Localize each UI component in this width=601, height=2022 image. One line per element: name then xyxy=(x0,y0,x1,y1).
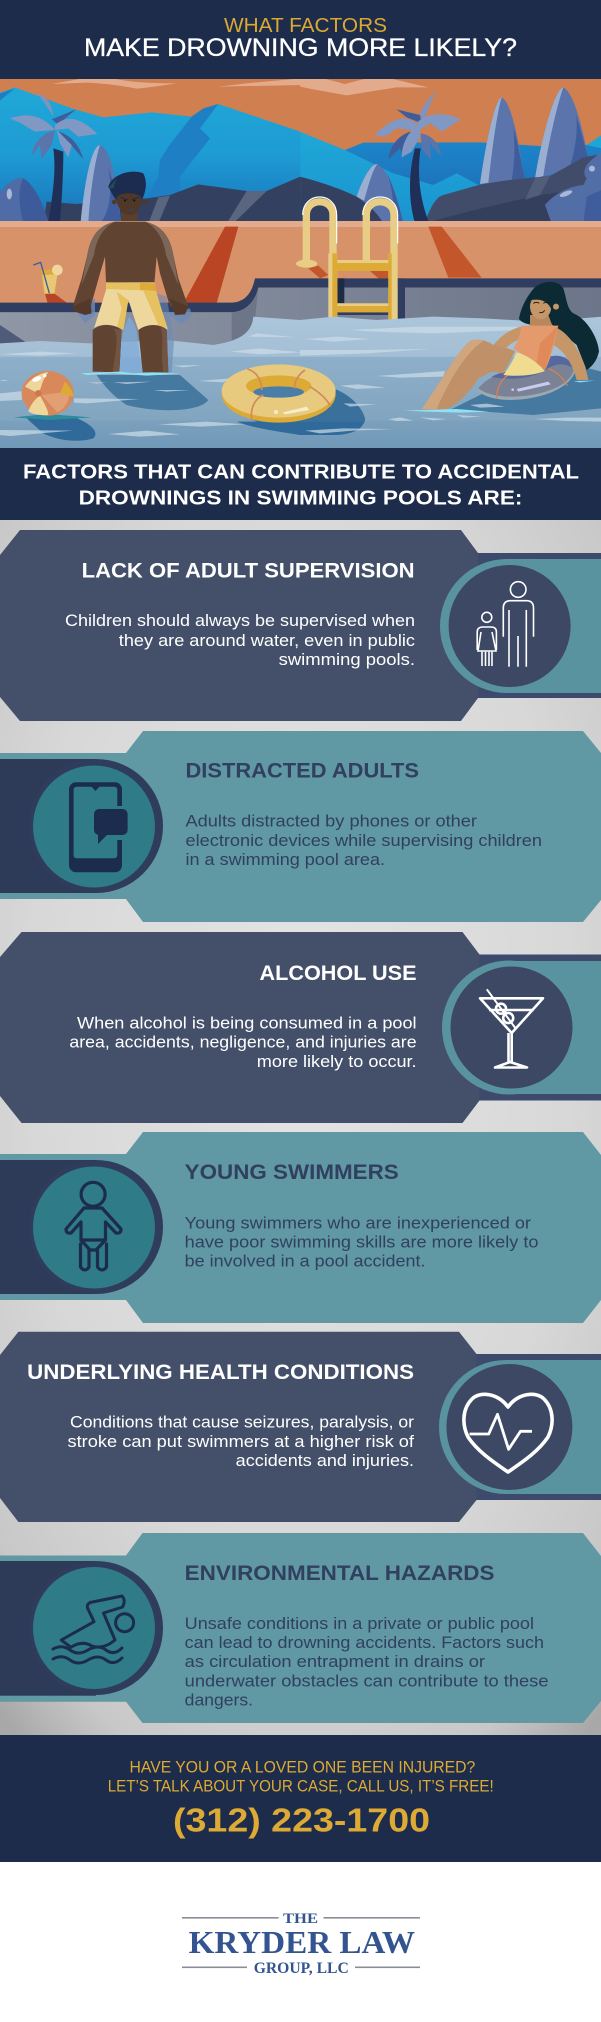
panel: lack of adult supervision xyxy=(0,530,601,721)
ladder rails xyxy=(306,202,333,263)
grey gradient background behind panels xyxy=(0,520,601,1735)
heading: YOUNG SWIMMERS xyxy=(185,1161,399,1184)
body text: electronic devices while supervising children xyxy=(186,831,542,850)
panel: distracted adults xyxy=(0,731,601,922)
pool deck wall, ladder, pool edge and water xyxy=(0,197,601,452)
body text xyxy=(69,1013,417,1071)
panel: young swimmers xyxy=(0,1132,601,1323)
body text xyxy=(185,1614,548,1710)
panel: underlying health conditions xyxy=(0,1332,601,1522)
body text: Children should always be supervised when xyxy=(65,611,415,630)
body text xyxy=(186,812,542,869)
body text: in a swimming pool area. xyxy=(186,850,385,869)
swim ring xyxy=(222,364,336,423)
heading: LACK OF ADULT SUPERVISION xyxy=(82,560,415,583)
body text: accidents and injuries. xyxy=(236,1451,414,1470)
heading: DISTRACTED ADULTS xyxy=(186,760,419,783)
backdrop left: mountains, rocks, palm xyxy=(0,78,302,223)
panel: alcohol use xyxy=(0,932,601,1123)
body text: Young swimmers who are inexperienced or xyxy=(185,1213,532,1232)
phone number: (312) 223-1700 xyxy=(173,1802,430,1839)
heading: UNDERLYING HEALTH CONDITIONS xyxy=(27,1361,414,1384)
icon: swimmer in waves xyxy=(53,1596,134,1663)
ladder shadows xyxy=(337,278,344,303)
heading: ENVIRONMENTAL HAZARDS xyxy=(185,1562,494,1585)
icon: phone with chat bubble xyxy=(69,782,128,872)
illustration: pool scene xyxy=(0,78,601,452)
water xyxy=(0,317,601,452)
body text: When alcohol is being consumed in a pool xyxy=(77,1013,417,1032)
cocktail glass xyxy=(33,262,63,294)
body text: as circulation entrapment in drains or xyxy=(185,1652,486,1671)
body text: can lead to drowning accidents. Factors such xyxy=(185,1633,544,1652)
logo: The Kryder Law Group xyxy=(182,1911,420,1977)
man standing in pool xyxy=(73,222,192,376)
call to action line 2: LET’S TALK ABOUT YOUR CASE, CALL US, IT’S FREE! xyxy=(108,1777,494,1795)
body text: area, accidents, negligence, and injuries are xyxy=(69,1032,417,1051)
backdrop right: mountains, rocks, palm xyxy=(300,78,601,223)
band heading xyxy=(0,448,601,520)
sky xyxy=(0,79,601,150)
icon: adult and child xyxy=(477,582,534,667)
body text: stroke can put swimmers at a higher risk of xyxy=(68,1432,414,1451)
body text: underwater obstacles can contribute to these xyxy=(185,1672,548,1691)
woman on inner tube xyxy=(403,282,599,413)
body text: Unsafe conditions in a private or public pool xyxy=(185,1614,534,1633)
body text xyxy=(65,611,415,669)
body text: more likely to occur. xyxy=(257,1052,417,1071)
body text: they are around water, even in public xyxy=(119,631,415,650)
call to action line 1: HAVE YOU OR A LOVED ONE BEEN INJURED? xyxy=(130,1758,475,1776)
logo: The Kryder Law Group: GROUP, LLC xyxy=(254,1960,349,1977)
body text: Conditions that cause seizures, paralysis, or xyxy=(70,1413,415,1432)
icon: martini glass xyxy=(480,989,543,1068)
band heading line 2: DROWNINGS IN SWIMMING POOLS ARE: xyxy=(79,487,522,509)
heading: ALCOHOL USE xyxy=(260,962,416,985)
icon: baby in diaper xyxy=(66,1182,121,1270)
title line 1: WHAT FACTORS xyxy=(224,15,387,37)
body text: dangers. xyxy=(185,1691,253,1710)
band heading line 1: FACTORS THAT CAN CONTRIBUTE TO ACCIDENTAL xyxy=(23,461,579,483)
logo: The Kryder Law Group: KRYDER LAW xyxy=(189,1924,415,1960)
logo: The Kryder Law Group: THE xyxy=(283,1911,318,1927)
body text: swimming pools. xyxy=(279,650,415,669)
body text: Adults distracted by phones or other xyxy=(186,812,478,831)
body text xyxy=(185,1213,538,1270)
water shadows and highlights xyxy=(0,327,601,441)
header band xyxy=(0,0,601,80)
panel: environmental hazards xyxy=(0,1533,601,1723)
title line 2: MAKE DROWNING MORE LIKELY? xyxy=(84,34,517,62)
beach ball xyxy=(13,371,92,420)
icon: heart with pulse xyxy=(464,1394,552,1472)
body text xyxy=(68,1413,415,1470)
body text: have poor swimming skills are more likely to xyxy=(185,1232,538,1251)
footer call to action xyxy=(0,1735,601,1862)
body text: be involved in a pool accident. xyxy=(185,1251,426,1270)
